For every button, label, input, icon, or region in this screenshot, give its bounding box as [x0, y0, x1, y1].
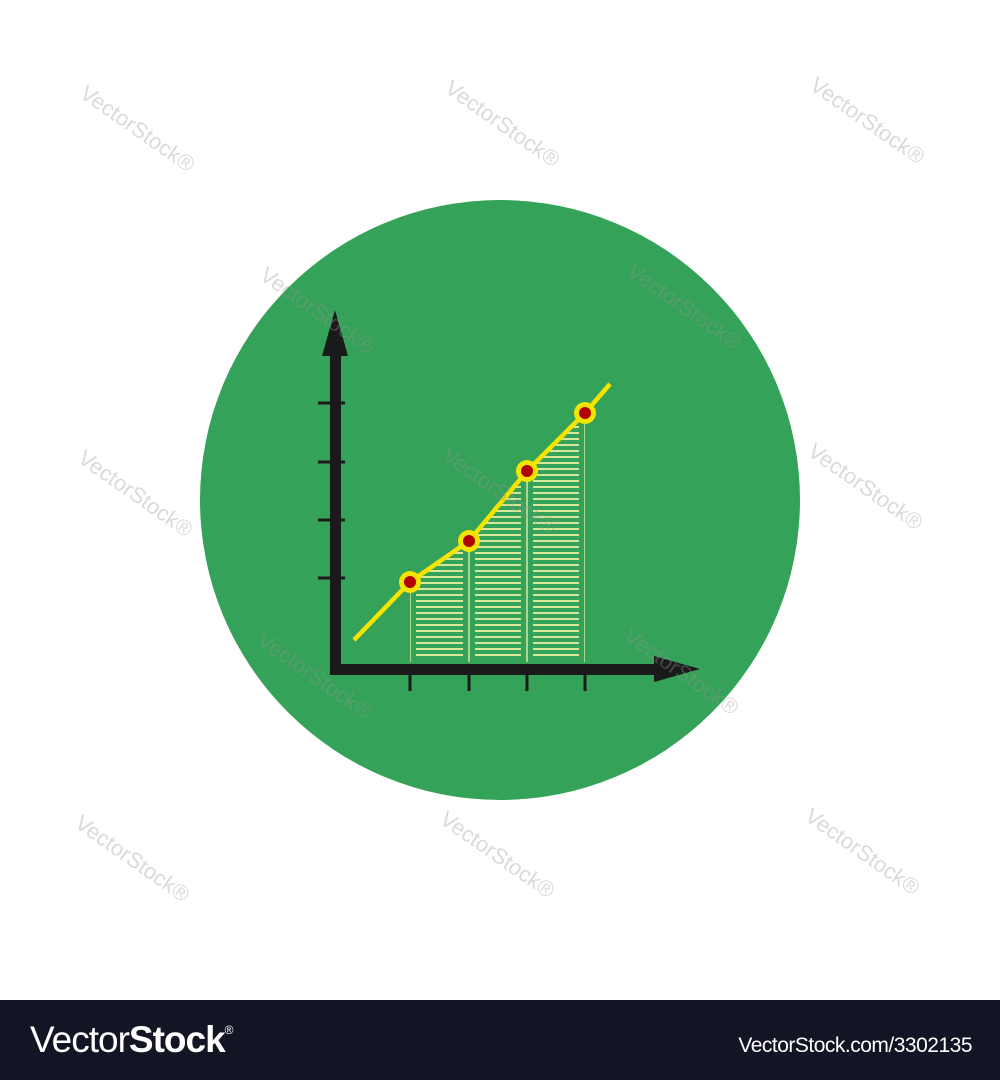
watermark texts: VectorStock®: [620, 623, 743, 720]
footer bar: [0, 1000, 1000, 1080]
icon: growth chart in green circle: [200, 200, 800, 800]
green circle background: [200, 200, 800, 800]
watermark texts: VectorStock®: [806, 72, 929, 169]
watermark texts: VectorStock®: [256, 262, 379, 359]
hatched area under line: [410, 405, 585, 662]
axes: [318, 310, 700, 691]
watermark texts: VectorStock®: [801, 803, 924, 900]
trend line: [354, 384, 610, 640]
watermark texts: VectorStock®: [623, 258, 746, 355]
footer logo: VectorStock®: [30, 1019, 233, 1060]
watermark texts: VectorStock®: [436, 806, 559, 903]
watermark texts: VectorStock®: [804, 438, 927, 535]
watermark texts: VectorStock®: [76, 80, 199, 177]
watermark texts: VectorStock®: [438, 442, 561, 539]
watermark texts: VectorStock®: [441, 75, 564, 172]
watermark texts: VectorStock®: [253, 627, 376, 724]
watermark texts: VectorStock®: [74, 445, 197, 542]
footer url: VectorStock.com/3302135: [738, 1034, 972, 1057]
data points: [399, 402, 596, 593]
watermark texts: VectorStock®: [71, 810, 194, 907]
